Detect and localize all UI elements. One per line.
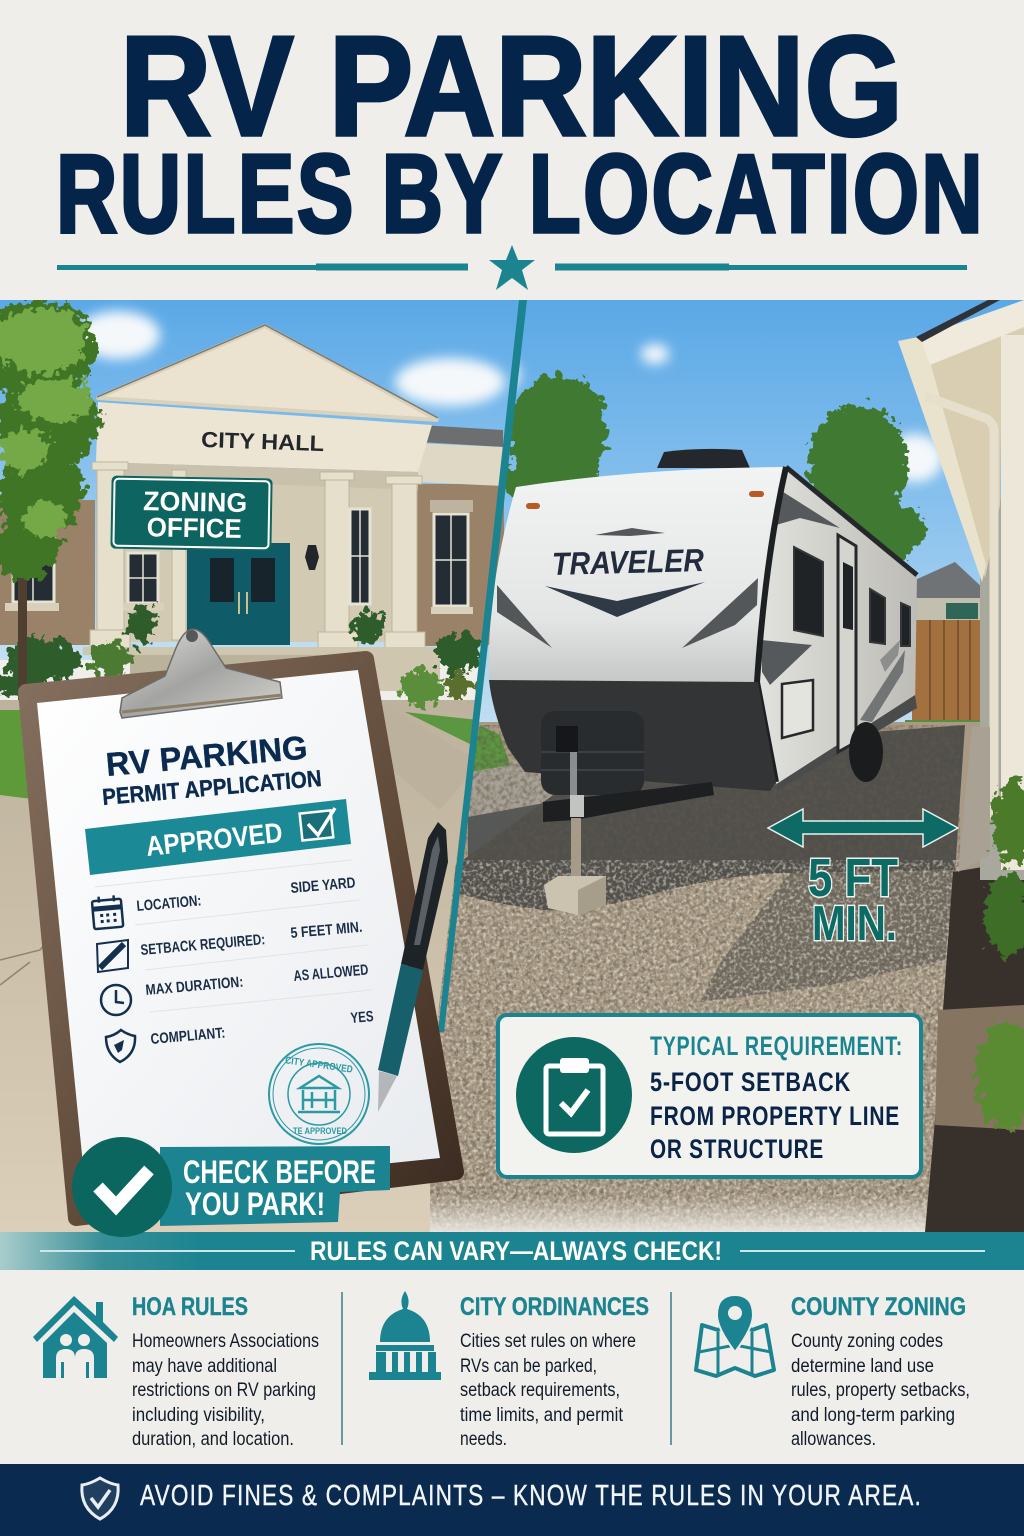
title [56, 7, 985, 256]
zoning office sign [110, 476, 273, 551]
background trees [500, 375, 924, 560]
cap edge [757, 467, 786, 782]
callout: typical requirement [498, 1015, 921, 1177]
paper sheet [37, 670, 440, 1195]
side wall [755, 467, 917, 785]
zoning office sign: OFFICE [147, 512, 242, 544]
column: hoa rules: HOA RULES [132, 1293, 248, 1321]
form rows: YES [350, 1008, 374, 1027]
form rows [136, 874, 374, 1048]
chevron [545, 582, 705, 617]
divider slash [438, 300, 527, 1032]
traveler logo: TRAVELER [551, 542, 704, 582]
side cornice [416, 443, 503, 486]
column: hoa rules [33, 1293, 319, 1450]
city hall lettering: CITY HALL [201, 427, 325, 456]
coupler [556, 726, 584, 817]
roof edge [916, 300, 1000, 342]
approval stamp [269, 1044, 369, 1144]
window sills [5, 603, 473, 614]
icon: shield check [82, 1478, 118, 1519]
clouds left [76, 311, 505, 406]
check before you park banner [72, 1137, 390, 1237]
concrete block [544, 876, 606, 915]
house wall and eave [898, 300, 1024, 880]
approval stamp: CITY APPROVED [284, 1055, 353, 1076]
icon: map pin [696, 1295, 774, 1376]
form rows: SETBACK REQUIRED: [140, 931, 266, 959]
zoning office sign: ZONING [143, 486, 247, 518]
portico beam [96, 462, 418, 490]
callout text [650, 1031, 903, 1164]
icon: clipboard check [516, 1037, 632, 1153]
steps [83, 647, 440, 691]
callout text: OR STRUCTURE [650, 1134, 824, 1164]
hitch frame [543, 782, 714, 822]
setback label [808, 848, 898, 951]
permit heading [101, 729, 323, 810]
setback arrow [768, 809, 958, 847]
clipboard permit [26, 629, 456, 1237]
city body text: needs. [460, 1429, 507, 1450]
left ground [0, 700, 475, 1232]
setback label: MIN. [812, 897, 897, 951]
side windows [794, 547, 910, 646]
front cap [489, 467, 786, 682]
callout text: 5-FOOT SETBACK [650, 1067, 851, 1097]
main wall [1001, 335, 1024, 870]
form rows: LOCATION: [136, 892, 202, 915]
banner strips [160, 1146, 390, 1226]
side skirt [765, 695, 917, 790]
check before you park banner: CHECK BEFORE [183, 1154, 376, 1190]
setback label: 5 FT [808, 848, 898, 908]
jack [571, 818, 581, 878]
column: city ordinances [369, 1291, 649, 1450]
icon: shield [106, 1030, 135, 1062]
city body text: Cities set rules on where [460, 1331, 636, 1352]
footer bar [0, 1464, 1024, 1536]
portico back wall [100, 470, 410, 642]
sky left [0, 300, 530, 660]
form rows: MAX DURATION: [145, 974, 244, 999]
city hall building [0, 325, 503, 706]
side graphics [761, 490, 905, 722]
clouds right [460, 344, 943, 482]
hoa body text [132, 1331, 319, 1450]
column: county zoning [696, 1293, 970, 1450]
propane cover [541, 711, 644, 795]
mulch bed [925, 860, 1024, 1232]
bushes [976, 780, 1024, 1130]
county body text: County zoning codes [791, 1331, 943, 1352]
hoa body text: including visibility, [132, 1405, 265, 1426]
form rows: AS ALLOWED [293, 962, 369, 985]
approved band: APPROVED [144, 817, 284, 862]
walk strip [958, 727, 990, 872]
form rows: 5 FEET MIN. [290, 919, 363, 942]
entry door [838, 535, 856, 752]
row separators [95, 860, 372, 1012]
panel: rv site photo [430, 300, 1024, 1235]
brick wing remnant [488, 503, 504, 645]
soffit [925, 310, 1024, 578]
roof vent [657, 449, 750, 468]
icon: house with people [33, 1296, 118, 1378]
pediment outline [97, 325, 438, 418]
bottom fade [430, 1198, 928, 1232]
window lintel [430, 500, 473, 512]
grey wedge shadow [700, 870, 955, 1002]
city body text: RVs can be parked, [460, 1356, 597, 1377]
approval stamp: TE APPROVED [293, 1126, 347, 1136]
wood fence [905, 620, 980, 725]
clipboard board [26, 659, 456, 1218]
icon: capitol [369, 1291, 441, 1380]
form rows: COMPLIANT: [150, 1025, 226, 1048]
pediment [97, 326, 438, 420]
wall lamp [305, 545, 319, 570]
travel trailer [489, 449, 917, 915]
approved band [85, 799, 351, 875]
side roof [420, 425, 503, 447]
county body text [791, 1331, 970, 1450]
hoa body text: duration, and location. [132, 1429, 294, 1450]
city body text [460, 1331, 636, 1450]
marker lights [526, 491, 764, 509]
city body text: time limits, and permit [460, 1405, 624, 1426]
check before you park banner: YOU PARK! [185, 1186, 325, 1222]
front lower panel [489, 680, 776, 791]
panel: info columns [0, 1270, 1024, 1464]
entablature [96, 402, 432, 472]
callout text: FROM PROPERTY LINE [650, 1101, 900, 1131]
front decals [497, 528, 758, 648]
icon: clock [101, 985, 131, 1015]
banner: rules can vary [0, 1232, 1024, 1270]
county body text: rules, property setbacks, [791, 1380, 970, 1401]
pen [378, 822, 448, 1112]
rake board [898, 336, 986, 582]
shrubs [0, 603, 480, 706]
column: county zoning: COUNTY ZONING [791, 1293, 966, 1321]
icon: ruler triangle [97, 940, 128, 972]
permit heading: RV PARKING [104, 729, 309, 783]
gutter [925, 396, 994, 820]
fascia [920, 300, 1024, 365]
neighbour house [916, 562, 980, 620]
brick wings [0, 484, 503, 646]
storage hatch [782, 680, 813, 738]
column: city ordinances: CITY ORDINANCES [460, 1293, 649, 1321]
permit heading: PERMIT APPLICATION [101, 765, 323, 810]
hoa body text: restrictions on RV parking [132, 1380, 316, 1401]
gravel texture [430, 725, 960, 1235]
banner: rules can vary: RULES CAN VARY—ALWAYS CHECK! [310, 1236, 722, 1266]
metal clip [120, 629, 282, 718]
city body text: setback requirements, [460, 1380, 620, 1401]
windows [13, 508, 468, 606]
hoa body text: Homeowners Associations [132, 1331, 319, 1352]
county body text: and long-term parking [791, 1405, 955, 1426]
side roof rail [786, 467, 917, 575]
title: RV PARKING [120, 7, 903, 166]
side wall [980, 500, 1024, 880]
sky right [479, 300, 1024, 722]
panel: city hall photo [0, 298, 530, 1232]
doors [187, 543, 290, 645]
title divider with star [57, 245, 967, 290]
wheels [849, 722, 883, 782]
icon: calendar [92, 895, 123, 929]
icon: checkbox [300, 808, 335, 840]
county body text: determine land use [791, 1356, 934, 1377]
window bars [13, 508, 468, 606]
asphalt shadow [452, 725, 965, 910]
columns [90, 462, 425, 650]
county body text: allowances. [791, 1429, 876, 1450]
hoa body text: may have additional [132, 1356, 277, 1377]
callout text: TYPICAL REQUIREMENT: [650, 1031, 903, 1061]
gravel base [430, 722, 1024, 1232]
icon: check badge [72, 1137, 172, 1237]
concrete pad left [468, 725, 553, 856]
form rows: SIDE YARD [290, 874, 356, 897]
tree left [0, 298, 100, 700]
